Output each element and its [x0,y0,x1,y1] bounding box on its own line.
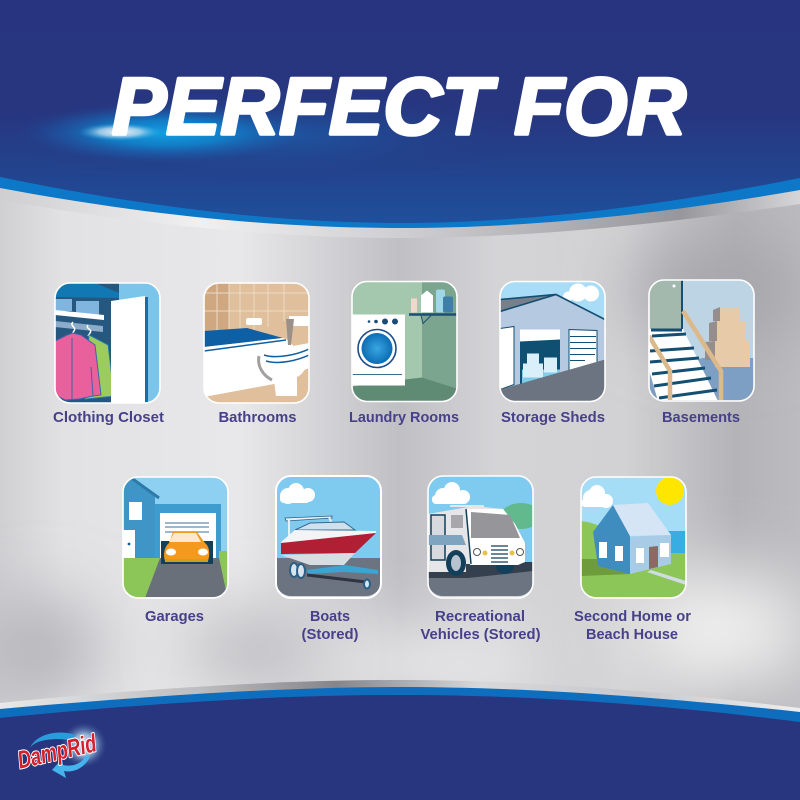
icon: storage sheds [500,282,605,402]
icon: recreational vehicles [428,476,541,598]
label: Laundry Rooms: Laundry Rooms [349,409,459,426]
label: Clothing Closet: Clothing Closet [53,409,164,426]
bottom banner [0,680,800,800]
icon: laundry rooms [352,282,457,402]
label: Garages: Garages [145,608,204,625]
icon: bathrooms [204,283,309,403]
icon: boats [276,476,381,598]
label: Recreational Vehicles (Stored): Recreational [435,608,525,625]
label: Second Home or Beach House [574,608,691,643]
labels [53,409,740,643]
label: Storage Sheds: Storage Sheds [501,409,605,426]
label: Boats (Stored): Boats [310,608,350,625]
label: Boats (Stored) [302,608,358,643]
label: Basements: Basements [662,409,740,426]
icon: basements [649,280,754,401]
icon: clothing closet [55,283,160,403]
icon: second home or beach house [581,477,686,598]
label: Recreational Vehicles (Stored) [420,608,540,643]
label: Recreational Vehicles (Stored): Vehicles (Stored) [420,626,540,643]
label: Second Home or Beach House: Second Home or [574,608,691,625]
label: Bathrooms: Bathrooms [218,409,296,426]
logo: DampRid: DampRid [15,729,100,775]
icon: garages [123,477,228,598]
top banner [0,0,800,238]
label: Second Home or Beach House: Beach House [586,626,678,643]
title: PERFECT FOR [112,62,686,152]
label: Boats (Stored): (Stored) [302,626,358,643]
